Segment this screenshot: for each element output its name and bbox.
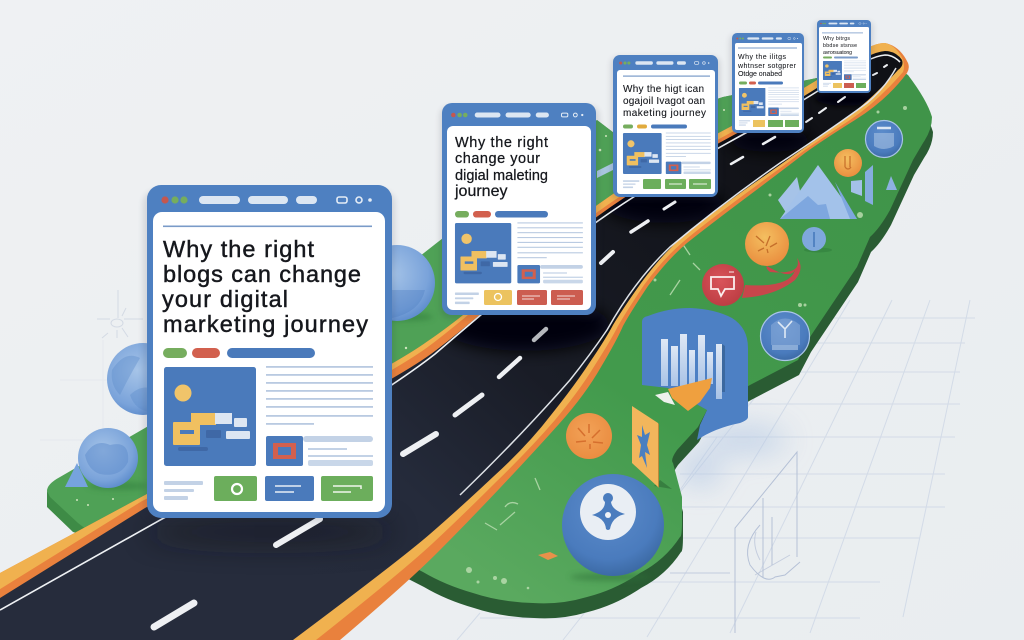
toolbar [451, 112, 583, 118]
icon: blue mountain and towers [778, 165, 897, 219]
road edge line: right [460, 68, 896, 495]
road shoulder: orange inner strip on the left side [0, 120, 762, 598]
card 3: blog preview [611, 55, 720, 200]
road centre dashes [154, 65, 887, 627]
sphere: top right globe [865, 120, 903, 158]
tag pills [823, 56, 858, 58]
card title [623, 84, 706, 119]
ball: red with chat icon [702, 264, 744, 306]
tag pills [623, 124, 687, 128]
card body [623, 133, 711, 188]
sphere: globe behind first card [107, 343, 179, 415]
left green island [47, 78, 880, 540]
sphere: small globe with triangle [65, 428, 148, 490]
card 2: blog preview [440, 103, 599, 319]
card body [739, 88, 799, 126]
card title [823, 36, 857, 56]
card title [737, 54, 797, 78]
ball: small orange [834, 149, 862, 177]
sketch: faint sun icon [97, 290, 143, 338]
action buttons [484, 290, 583, 305]
card title: digial maleting [455, 168, 548, 184]
island shadow [678, 426, 787, 486]
toolbar [161, 196, 372, 204]
sphere: lower right globe [760, 311, 810, 361]
card title: Why the right [163, 236, 314, 262]
card title [162, 236, 368, 337]
card title: Why the ilitgs [738, 54, 786, 61]
card 1: blog preview [143, 185, 395, 522]
right green island [380, 60, 933, 618]
action buttons [833, 83, 866, 88]
card body: image and text lines [164, 366, 373, 500]
card title: ogajoil Ivagot oan [623, 96, 705, 107]
action buttons [214, 476, 373, 501]
card title [454, 135, 548, 200]
card title: whtnser sotgprer [737, 63, 797, 70]
card title: your digital [162, 286, 288, 312]
sketch: wireframe outline at lower right [735, 452, 800, 633]
chart bars [661, 334, 722, 399]
card title: avrorsuatong [823, 50, 852, 56]
sphere: globe behind first and second cards [359, 245, 435, 321]
card title: maketing journey [623, 108, 706, 119]
tag pills [455, 211, 548, 218]
card title: blogs can change [163, 261, 361, 287]
panel: blue bar chart [642, 308, 748, 440]
card body [823, 61, 866, 86]
sign: yellow tilted card [632, 406, 672, 489]
road edge line: left [0, 55, 900, 610]
card title: Why bitrgs [823, 36, 850, 42]
card title: bbdse stsnse [823, 43, 857, 49]
perspective grid floor [40, 300, 975, 640]
card title: Why the higt ican [623, 84, 704, 95]
ribbon: red [742, 258, 801, 298]
toolbar [619, 61, 709, 65]
card title: Otdge onabed [738, 71, 782, 78]
tag pills [163, 348, 315, 358]
sphere: big blue button [562, 474, 664, 581]
card title: journey [454, 183, 507, 200]
action buttons [643, 179, 711, 189]
toolbar [820, 23, 866, 24]
icon: star mark [592, 493, 625, 530]
ball: lower orange [566, 413, 612, 459]
card body [455, 222, 583, 304]
ball: large orange [745, 222, 789, 266]
card title: marketing journey [163, 311, 368, 337]
tag pills [739, 82, 783, 84]
card 4: blog preview [730, 33, 806, 135]
toolbar [736, 37, 798, 40]
card title: change your [455, 151, 540, 167]
card 5: blog preview [815, 20, 873, 96]
card title: Why the right [455, 135, 548, 151]
ball: small blue [802, 227, 832, 252]
action buttons [753, 120, 799, 127]
